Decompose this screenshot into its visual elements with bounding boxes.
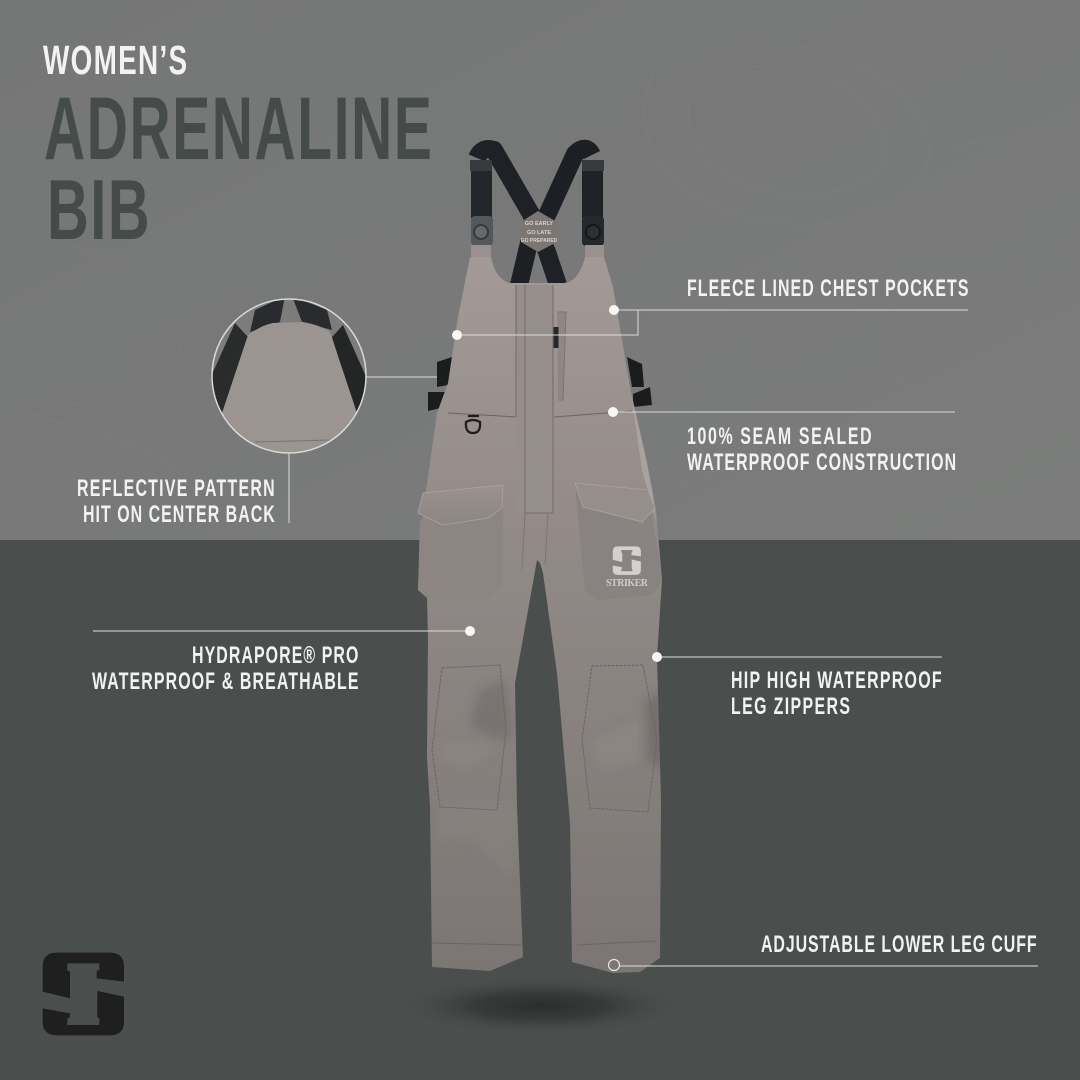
callout: seam sealed xyxy=(687,423,956,476)
background: upper panel xyxy=(0,0,1080,540)
bib body xyxy=(418,257,662,973)
logo: Striker S xyxy=(43,953,124,1035)
callout: hydrapore xyxy=(92,642,358,695)
callout: leg zippers: LEG ZIPPERS xyxy=(731,693,850,720)
strap hex patch: GO PREPARED xyxy=(521,238,558,244)
callout: leg zippers xyxy=(731,667,942,720)
strap hex patch: GO LATE xyxy=(527,230,551,236)
callout: seam sealed: 100% SEAM SEALED xyxy=(687,423,872,450)
title: WOMEN’S xyxy=(43,38,187,83)
title: ADRENALINE xyxy=(44,78,432,178)
left cargo pocket xyxy=(418,485,503,602)
callout: hydrapore: WATERPROOF & BREATHABLE xyxy=(92,668,359,695)
callout: fleece lined chest pockets: FLEECE LINED CHEST POCKETS xyxy=(687,275,968,302)
callout: seam sealed: WATERPROOF CONSTRUCTION xyxy=(687,449,956,476)
callout: hydrapore: HYDRAPORE® PRO xyxy=(192,642,358,669)
callout: reflective pattern xyxy=(77,475,275,528)
inset: reflective detail xyxy=(205,296,372,455)
callout: leg zippers: HIP HIGH WATERPROOF xyxy=(731,667,942,694)
ground shadow xyxy=(392,976,688,1036)
strap hex patch xyxy=(521,211,558,252)
D-ring xyxy=(466,416,480,433)
title xyxy=(43,38,432,258)
pocket logo xyxy=(606,546,649,589)
product: bib overalls xyxy=(418,149,665,973)
pocket logo: STRIKER xyxy=(606,578,649,589)
callout: reflective pattern: HIT ON CENTER BACK xyxy=(83,501,275,528)
callout lines and dots xyxy=(93,305,1038,970)
callout: reflective pattern: REFLECTIVE PATTERN xyxy=(77,475,275,502)
right cargo pocket xyxy=(575,483,662,600)
strap hex patch: GO EARLY xyxy=(525,221,553,227)
callout: leg cuff: ADJUSTABLE LOWER LEG CUFF xyxy=(761,931,1037,958)
fabric folds and seams xyxy=(432,400,665,945)
title: BIB xyxy=(47,163,150,258)
background: lower panel xyxy=(0,540,1080,1080)
center placket xyxy=(516,285,566,570)
side straps xyxy=(428,357,652,411)
topographic contour pattern xyxy=(0,42,1080,540)
suspender straps xyxy=(470,149,604,285)
